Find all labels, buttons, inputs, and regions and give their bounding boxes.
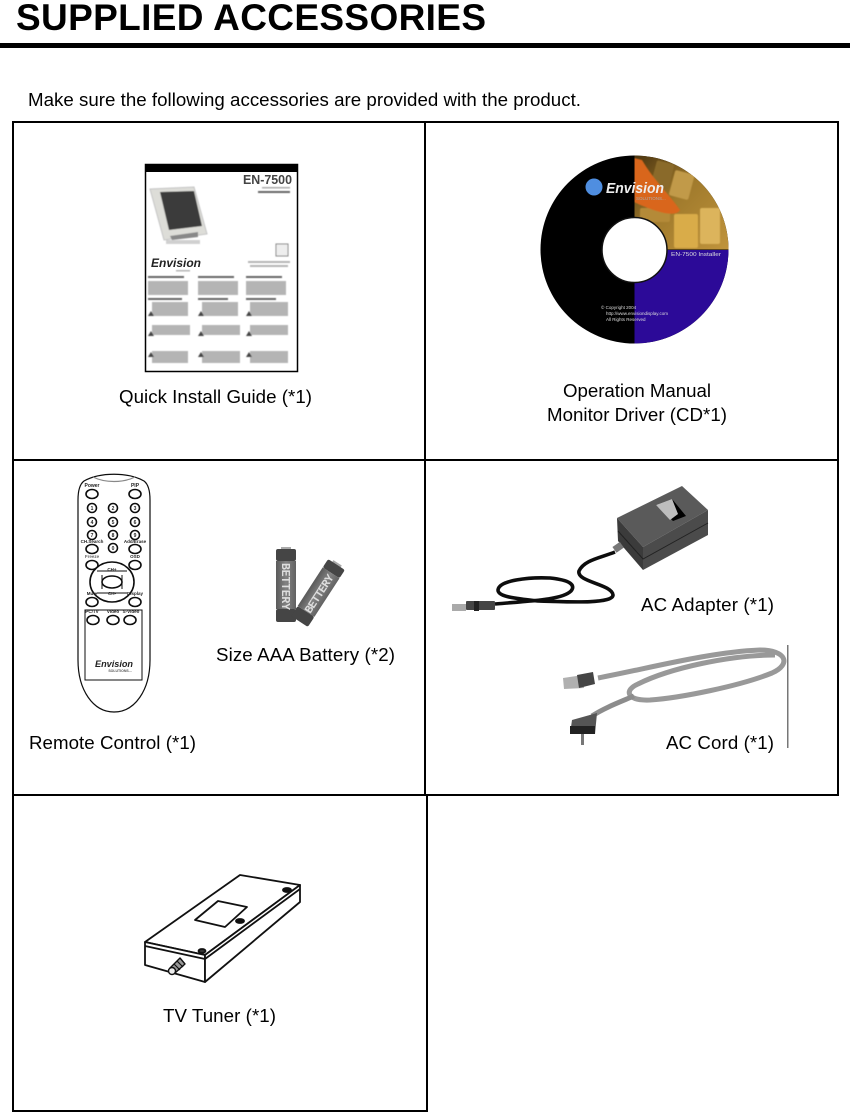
icon: remote control: Display bbox=[127, 591, 143, 596]
icon: remote control bbox=[78, 474, 150, 712]
title rule bbox=[0, 43, 850, 48]
icon: remote control: SOLUTIONS... bbox=[108, 669, 132, 673]
icon: remote control: 1 bbox=[91, 506, 94, 512]
icon: remote control: 0 bbox=[112, 546, 115, 552]
intro text: Make sure the following accessories are provided with the product. bbox=[28, 89, 581, 110]
icon: remote control: 3 bbox=[134, 506, 137, 512]
icon: CD: All Rights Reserved bbox=[606, 317, 646, 322]
icon: CD: EN-7500 Installer bbox=[671, 252, 721, 258]
icon: TV tuner bbox=[145, 875, 300, 982]
icon: AC adapter bbox=[452, 486, 708, 611]
icon: remote control: Add/Erase bbox=[124, 539, 147, 544]
icon: CD: © Copyright 2004 bbox=[601, 304, 637, 310]
icon: remote control: 4 bbox=[91, 520, 94, 526]
icon: AC cord bbox=[563, 645, 788, 748]
icon: CD bbox=[540, 156, 728, 344]
icon: remote control: Envision bbox=[95, 659, 133, 670]
label: monitor driver: Monitor Driver (CD*1) bbox=[547, 404, 727, 425]
icon: remote control: Power bbox=[84, 483, 100, 489]
icon: remote control: Freeze bbox=[85, 554, 100, 559]
label: TV tuner: TV Tuner (*1) bbox=[163, 1005, 276, 1026]
icon: remote control: CH- bbox=[108, 591, 116, 596]
label: remote control: Remote Control (*1) bbox=[29, 732, 196, 753]
icon: AAA batteries bbox=[276, 547, 346, 627]
icon: remote control: 6 bbox=[134, 520, 137, 526]
icon: CD: SOLUTIONS... bbox=[636, 196, 666, 201]
icon: remote control: CH+ bbox=[107, 567, 117, 572]
icon: remote control: 7 bbox=[91, 533, 94, 539]
icon: remote control: Mute bbox=[87, 591, 98, 596]
label: operation manual: Operation Manual bbox=[563, 380, 711, 401]
icon: remote control: 8 bbox=[112, 533, 115, 539]
icon: remote control: 2 bbox=[112, 506, 115, 512]
icon: CD: http://www.envisiondisplay.com bbox=[606, 311, 668, 316]
icon: remote control: PC/TV bbox=[85, 609, 99, 614]
label: AC cord: AC Cord (*1) bbox=[666, 732, 774, 753]
icon: remote control: CH.Search bbox=[81, 539, 104, 544]
icon: remote control: Video bbox=[107, 609, 119, 614]
icon: quick install guide: Envision bbox=[151, 258, 201, 270]
icon: remote control: S-Video bbox=[123, 609, 140, 614]
icon: remote control: 5 bbox=[112, 520, 115, 526]
icon: quick install guide: EN-7500 bbox=[243, 173, 292, 187]
icon: CD: Envision bbox=[606, 180, 664, 197]
icon: remote control: 9 bbox=[134, 533, 137, 539]
label: AAA battery: Size AAA Battery (*2) bbox=[216, 644, 395, 665]
icon: remote control: OSD bbox=[130, 554, 141, 559]
icon: quick install guide bbox=[146, 164, 298, 372]
label: quick install guide: Quick Install Guide (*1) bbox=[119, 386, 312, 407]
icon: remote control: PIP bbox=[131, 483, 140, 489]
icon: AAA batteries: BETTERY bbox=[303, 572, 338, 616]
label: AC adapter: AC Adapter (*1) bbox=[641, 594, 774, 615]
icon: AAA batteries: BETTERY bbox=[278, 563, 291, 610]
